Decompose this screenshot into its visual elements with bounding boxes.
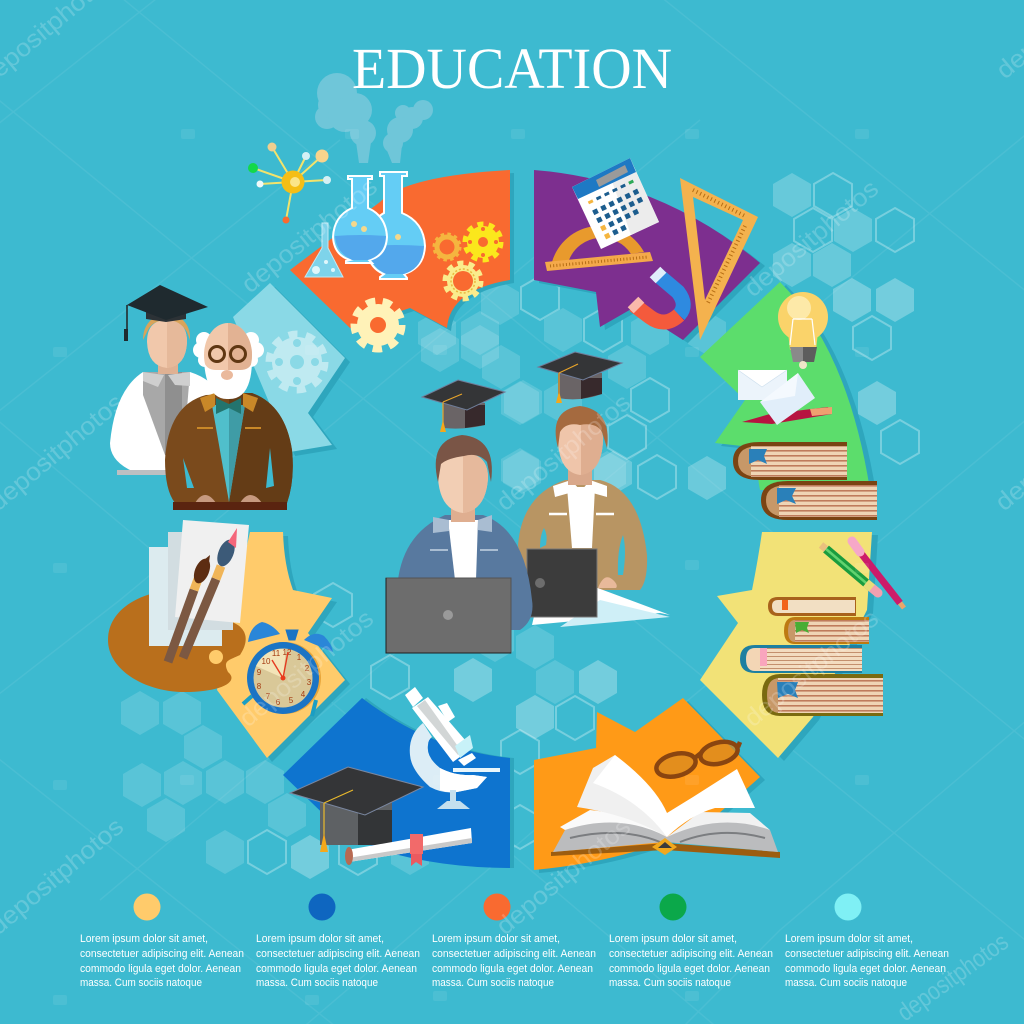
text block 1 bbox=[80, 933, 244, 989]
legend dots bbox=[134, 894, 862, 920]
figure: professor bbox=[165, 323, 293, 510]
olive book bbox=[762, 674, 883, 716]
icon: alarm clock: 10 bbox=[262, 657, 271, 666]
icon: cap back student bbox=[538, 352, 622, 403]
panel: light yellow bbox=[217, 532, 350, 762]
text block 3: massa. Cum sociis natoque bbox=[432, 977, 554, 989]
text block 4: Lorem ipsum dolor sit amet, bbox=[609, 933, 737, 945]
panel: amber orange bbox=[534, 698, 765, 873]
text block 2 bbox=[256, 933, 420, 989]
icon: pale gear bbox=[269, 334, 325, 390]
icon: alarm clock: 11 bbox=[272, 649, 281, 658]
panel: blue bbox=[283, 698, 514, 868]
text block 5: Lorem ipsum dolor sit amet, bbox=[785, 933, 913, 945]
icon: green panel books bbox=[733, 442, 877, 520]
hexagon pattern bbox=[121, 173, 914, 879]
figure: graduate in white coat bbox=[110, 312, 222, 475]
large flask bbox=[366, 172, 425, 279]
icon: alarm clock: 5 bbox=[289, 696, 294, 705]
icon: calendar bbox=[572, 158, 659, 249]
icon: molecule bbox=[248, 142, 331, 224]
icon: pencils bbox=[821, 541, 904, 608]
panel: light blue gear bbox=[233, 283, 350, 456]
icon: microscope bbox=[405, 687, 500, 809]
icon: glasses bbox=[654, 738, 740, 781]
icon: envelopes and pencil bbox=[738, 370, 832, 425]
icon: paper sheets bbox=[149, 520, 249, 646]
text block 1: consectetuer adipiscing elit. Aenean bbox=[80, 948, 244, 960]
icon: alarm clock: 3 bbox=[307, 678, 312, 687]
text block 5 bbox=[785, 933, 949, 989]
icon: cream gear bbox=[354, 301, 402, 349]
title: EDUCATION bbox=[352, 36, 672, 101]
panel: green bbox=[700, 282, 876, 493]
figure: back student bbox=[518, 406, 647, 590]
icon: flasks bbox=[305, 172, 425, 279]
icon: dark laptop bbox=[527, 549, 597, 617]
figure: front student bbox=[397, 435, 532, 630]
icon: alarm clock: 4 bbox=[301, 690, 306, 699]
text block 3: consectetuer adipiscing elit. Aenean bbox=[432, 948, 596, 960]
icon: alarm clock: 8 bbox=[257, 682, 262, 691]
green mark book bbox=[784, 617, 869, 644]
text block 4: commodo ligula eget dolor. Aenean bbox=[609, 963, 770, 975]
text block 3: commodo ligula eget dolor. Aenean bbox=[432, 963, 593, 975]
text block 5: massa. Cum sociis natoque bbox=[785, 977, 907, 989]
icon: protractor bbox=[545, 226, 653, 271]
icon: pale yellow gear bbox=[445, 263, 481, 299]
icon: diploma bbox=[345, 828, 472, 866]
text block 1: commodo ligula eget dolor. Aenean bbox=[80, 963, 241, 975]
icon: light bulb bbox=[778, 292, 828, 369]
icon: paper under back student bbox=[532, 587, 670, 627]
text block 4: consectetuer adipiscing elit. Aenean bbox=[609, 948, 773, 960]
watermarks: depositphotos bbox=[234, 604, 379, 733]
text block 3 bbox=[432, 933, 596, 989]
text block 2: commodo ligula eget dolor. Aenean bbox=[256, 963, 417, 975]
medium flask bbox=[333, 176, 387, 263]
watermarks: depositphotos bbox=[739, 174, 884, 303]
icon: front laptop bbox=[386, 578, 511, 653]
panel: yellow bbox=[700, 532, 878, 761]
watermarks: depositphotos bbox=[491, 812, 636, 941]
icon: large graduation cap bbox=[290, 767, 423, 852]
icon: alarm clock: 9 bbox=[257, 668, 262, 677]
text block 1: massa. Cum sociis natoque bbox=[80, 977, 202, 989]
panel: smoke bbox=[315, 73, 433, 163]
icon: cap front student bbox=[422, 380, 505, 432]
panel: math purple bbox=[534, 170, 765, 343]
icon: paint brushes bbox=[168, 528, 238, 662]
icon: set square bbox=[680, 178, 758, 340]
text block 2: Lorem ipsum dolor sit amet, bbox=[256, 933, 384, 945]
teal book bbox=[740, 645, 862, 673]
icon: book stack bbox=[740, 597, 883, 716]
icon: palette bbox=[108, 590, 246, 692]
small flask bbox=[305, 223, 343, 277]
watermarks: depositphotos bbox=[491, 388, 636, 517]
text block 5: consectetuer adipiscing elit. Aenean bbox=[785, 948, 949, 960]
watermarks: depositphotos bbox=[739, 604, 884, 733]
icon: graduate cap bbox=[124, 285, 208, 341]
icon: magnet bbox=[633, 272, 683, 322]
text block 2: massa. Cum sociis natoque bbox=[256, 977, 378, 989]
text block 3: Lorem ipsum dolor sit amet, bbox=[432, 933, 560, 945]
icon: alarm clock: 1 bbox=[297, 653, 302, 662]
text block 4: massa. Cum sociis natoque bbox=[609, 977, 731, 989]
text block 2: consectetuer adipiscing elit. Aenean bbox=[256, 948, 420, 960]
top book bbox=[733, 442, 847, 480]
icon: alarm clock bbox=[243, 622, 333, 716]
icon: alarm clock: 7 bbox=[266, 692, 271, 701]
icon: orange ring gear bbox=[434, 234, 460, 260]
panel: chemistry orange bbox=[290, 170, 514, 331]
thin book bbox=[768, 597, 856, 616]
icon: open book bbox=[551, 755, 780, 858]
icon: alarm clock: 2 bbox=[305, 664, 310, 673]
text block 1: Lorem ipsum dolor sit amet, bbox=[80, 933, 208, 945]
lower book bbox=[761, 481, 877, 520]
icon: alarm clock: 12 bbox=[283, 648, 292, 657]
icon: alarm clock: 6 bbox=[276, 698, 281, 707]
text block 4 bbox=[609, 933, 773, 989]
watermarks: depositphotos bbox=[236, 172, 383, 299]
icon: yellow gear bbox=[465, 224, 501, 260]
text block 5: commodo ligula eget dolor. Aenean bbox=[785, 963, 946, 975]
